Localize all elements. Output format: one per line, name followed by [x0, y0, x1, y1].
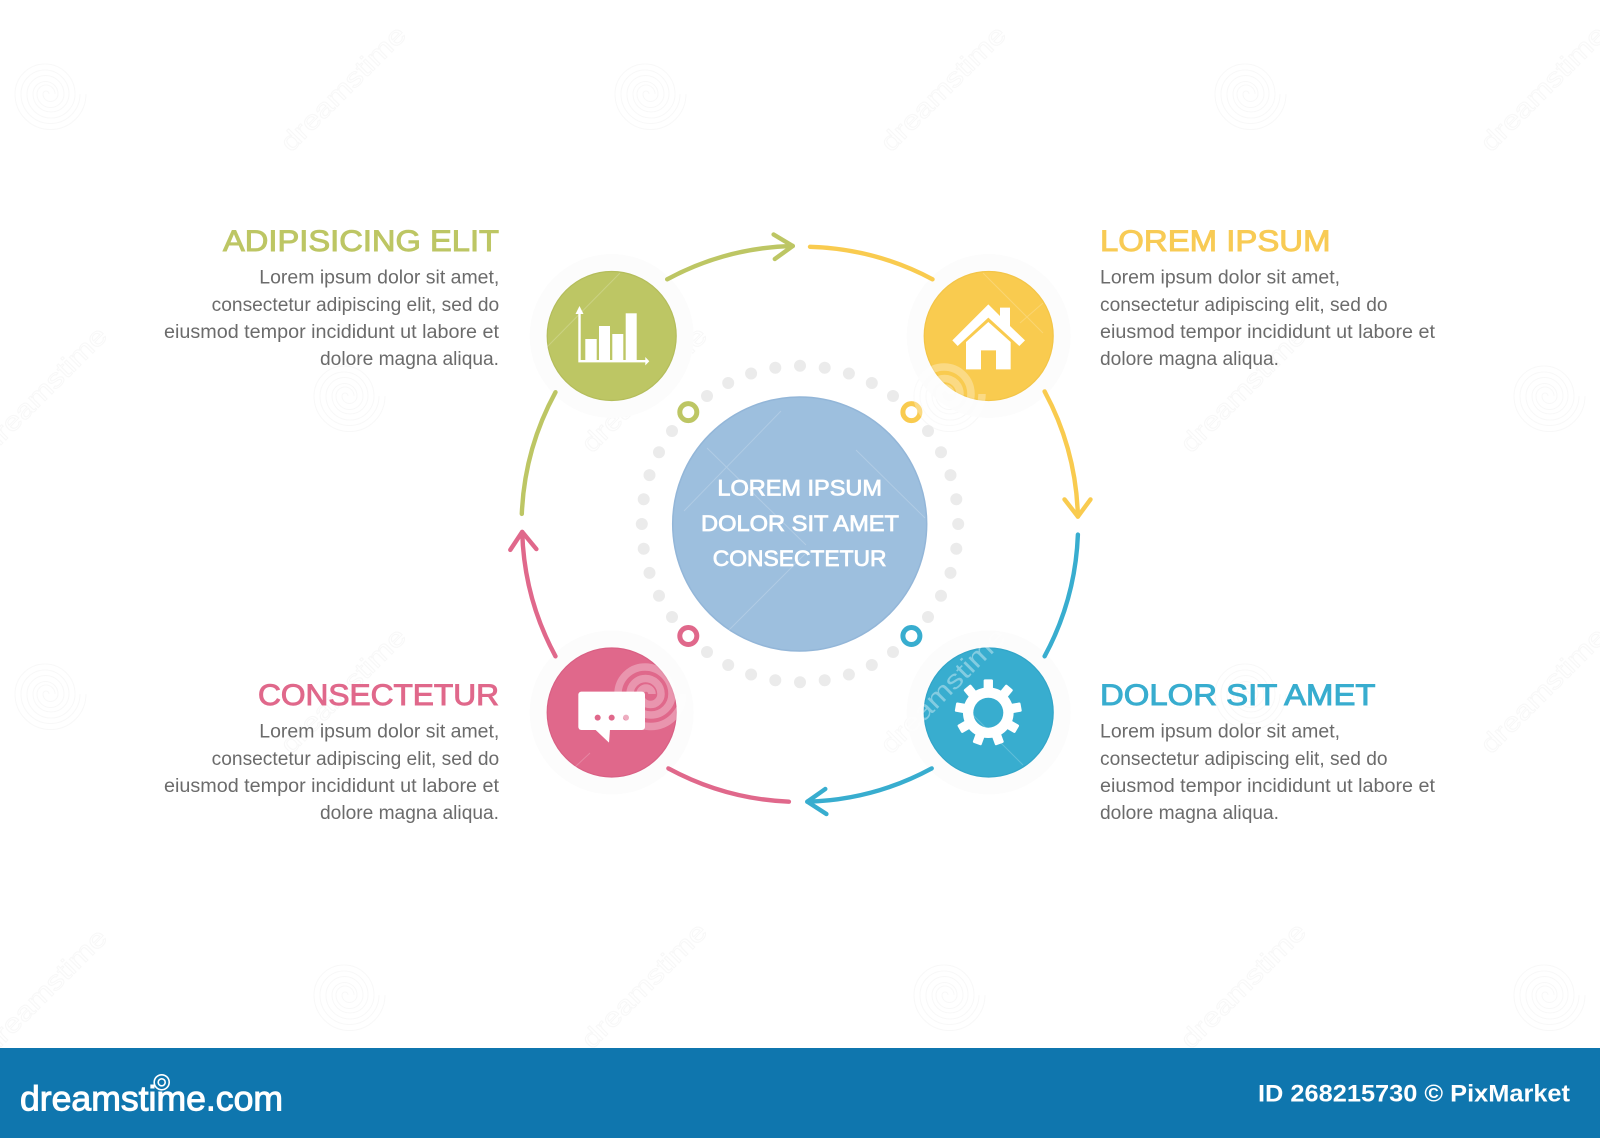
- watermark pattern on the white background: dreamstime: [274, 19, 412, 157]
- footer image id: ID 268215730 © PixMarket: [1258, 1081, 1570, 1108]
- text block: consectetur: consectetur adipiscing elit, sed do: [212, 749, 499, 770]
- text block: adipisicing elit: ADIPISICING ELIT: [223, 225, 499, 258]
- text block: consectetur: [164, 679, 500, 824]
- watermark pattern on the white background: dreamstime: [1474, 19, 1600, 157]
- center circle text: DOLOR SIT AMET: [701, 511, 899, 536]
- watermark pattern on the white background: dreamstime: [1174, 916, 1312, 1054]
- text block: dolor sit amet: consectetur adipiscing elit, sed do: [1100, 749, 1388, 770]
- text block: adipisicing elit: eiusmod tempor incididunt ut labore et: [164, 322, 500, 343]
- text block: consectetur: CONSECTETUR: [258, 679, 499, 712]
- text block: consectetur: dolore magna aliqua.: [320, 803, 499, 824]
- footer logo spiral: [154, 1075, 169, 1090]
- text block: dolor sit amet: Lorem ipsum dolor sit amet,: [1100, 722, 1340, 742]
- watermark pattern on the white background: dreamstime: [1474, 621, 1600, 759]
- text block: dolor sit amet: DOLOR SIT AMET: [1100, 679, 1376, 712]
- icon: speech bubble: [578, 692, 645, 743]
- node: green chart: [547, 272, 676, 400]
- text block: lorem ipsum: LOREM IPSUM: [1100, 225, 1330, 258]
- arrow: yellow arc to right: [810, 247, 1090, 517]
- text block: consectetur: Lorem ipsum dolor sit amet,: [259, 722, 499, 742]
- watermark pattern on the white background: dreamstime: [274, 621, 412, 759]
- center circle text: CONSECTETUR: [713, 546, 886, 571]
- arrow: green arc to top: [522, 234, 793, 514]
- text block: lorem ipsum: dolore magna aliqua.: [1100, 349, 1279, 370]
- small ring markers: [680, 404, 920, 644]
- dotted inner ring: [642, 366, 958, 682]
- text block: dolor sit amet: [1100, 679, 1436, 824]
- watermark pattern on the white background: dreamstime: [575, 320, 713, 458]
- footer banner: [0, 1048, 1600, 1138]
- text block: adipisicing elit: consectetur adipiscing elit, sed do: [212, 295, 499, 316]
- arrow: blue arc to bottom: [807, 535, 1078, 814]
- center circle: [673, 397, 927, 651]
- text block: lorem ipsum: consectetur adipiscing elit, sed do: [1100, 295, 1388, 316]
- watermark pattern on the white background: dreamstime: [874, 19, 1012, 157]
- footer logo wordmark: dreamstime.com: [20, 1080, 283, 1118]
- watermark pattern on the white background: dreamstime: [874, 621, 1012, 759]
- text block: consectetur: eiusmod tempor incididunt ut labore et: [164, 776, 500, 797]
- icon: bar chart: [576, 306, 649, 365]
- node: blue gear: [924, 648, 1053, 777]
- watermark overlay on coloured circles: dreamstime: [874, 621, 1012, 759]
- arrow: pink arc to left: [510, 532, 789, 802]
- text block: adipisicing elit: [164, 225, 500, 370]
- node: yellow home: [924, 272, 1053, 400]
- center circle text: [701, 476, 899, 571]
- text block: adipisicing elit: dolore magna aliqua.: [320, 349, 499, 370]
- watermark pattern on the white background: dreamstime: [575, 916, 713, 1054]
- text block: dolor sit amet: dolore magna aliqua.: [1100, 803, 1279, 824]
- center circle text: LOREM IPSUM: [717, 476, 882, 500]
- node halos: [530, 254, 1071, 794]
- watermark pattern on the white background: dreamstime: [1174, 320, 1312, 458]
- text block: lorem ipsum: Lorem ipsum dolor sit amet,: [1100, 268, 1340, 288]
- text block: adipisicing elit: Lorem ipsum dolor sit amet,: [259, 268, 499, 288]
- icon: gear: [955, 679, 1022, 746]
- watermark overlay on coloured circles: [547, 273, 1043, 767]
- text block: lorem ipsum: [1100, 225, 1436, 370]
- icon: house: [952, 304, 1025, 369]
- text block: lorem ipsum: eiusmod tempor incididunt ut labore et: [1100, 322, 1436, 343]
- node: pink speech bubble: [547, 648, 676, 777]
- text block: dolor sit amet: eiusmod tempor incididunt ut labore et: [1100, 776, 1436, 797]
